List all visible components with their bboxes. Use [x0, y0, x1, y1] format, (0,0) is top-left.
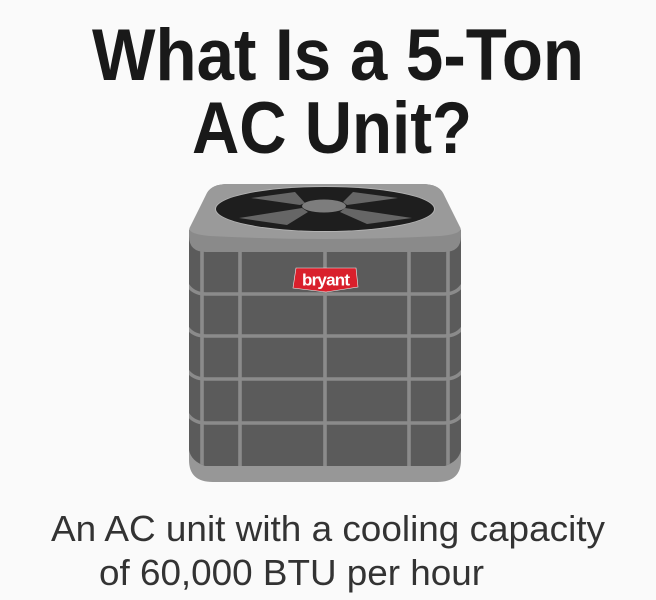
subtitle: An AC unit with a cooling capacity	[51, 508, 605, 549]
infographic canvas	[51, 27, 605, 592]
grille bars	[187, 250, 463, 466]
fan hub	[302, 200, 346, 212]
fan blades	[239, 192, 412, 225]
lid	[189, 184, 461, 252]
fan opening	[216, 187, 434, 231]
title: AC Unit?	[192, 88, 472, 169]
title: What Is a 5-Ton	[92, 15, 584, 96]
title	[92, 15, 584, 169]
logo: bryant badge: bryant	[302, 270, 350, 290]
subtitle: of 60,000 BTU per hour	[99, 552, 484, 593]
icon: air conditioner condenser unit	[187, 184, 463, 482]
fan opening rim	[215, 186, 435, 232]
logo: bryant badge	[293, 268, 358, 292]
body panel	[189, 235, 461, 466]
lid top surface	[189, 184, 461, 239]
subtitle	[51, 508, 605, 593]
base	[189, 440, 461, 482]
